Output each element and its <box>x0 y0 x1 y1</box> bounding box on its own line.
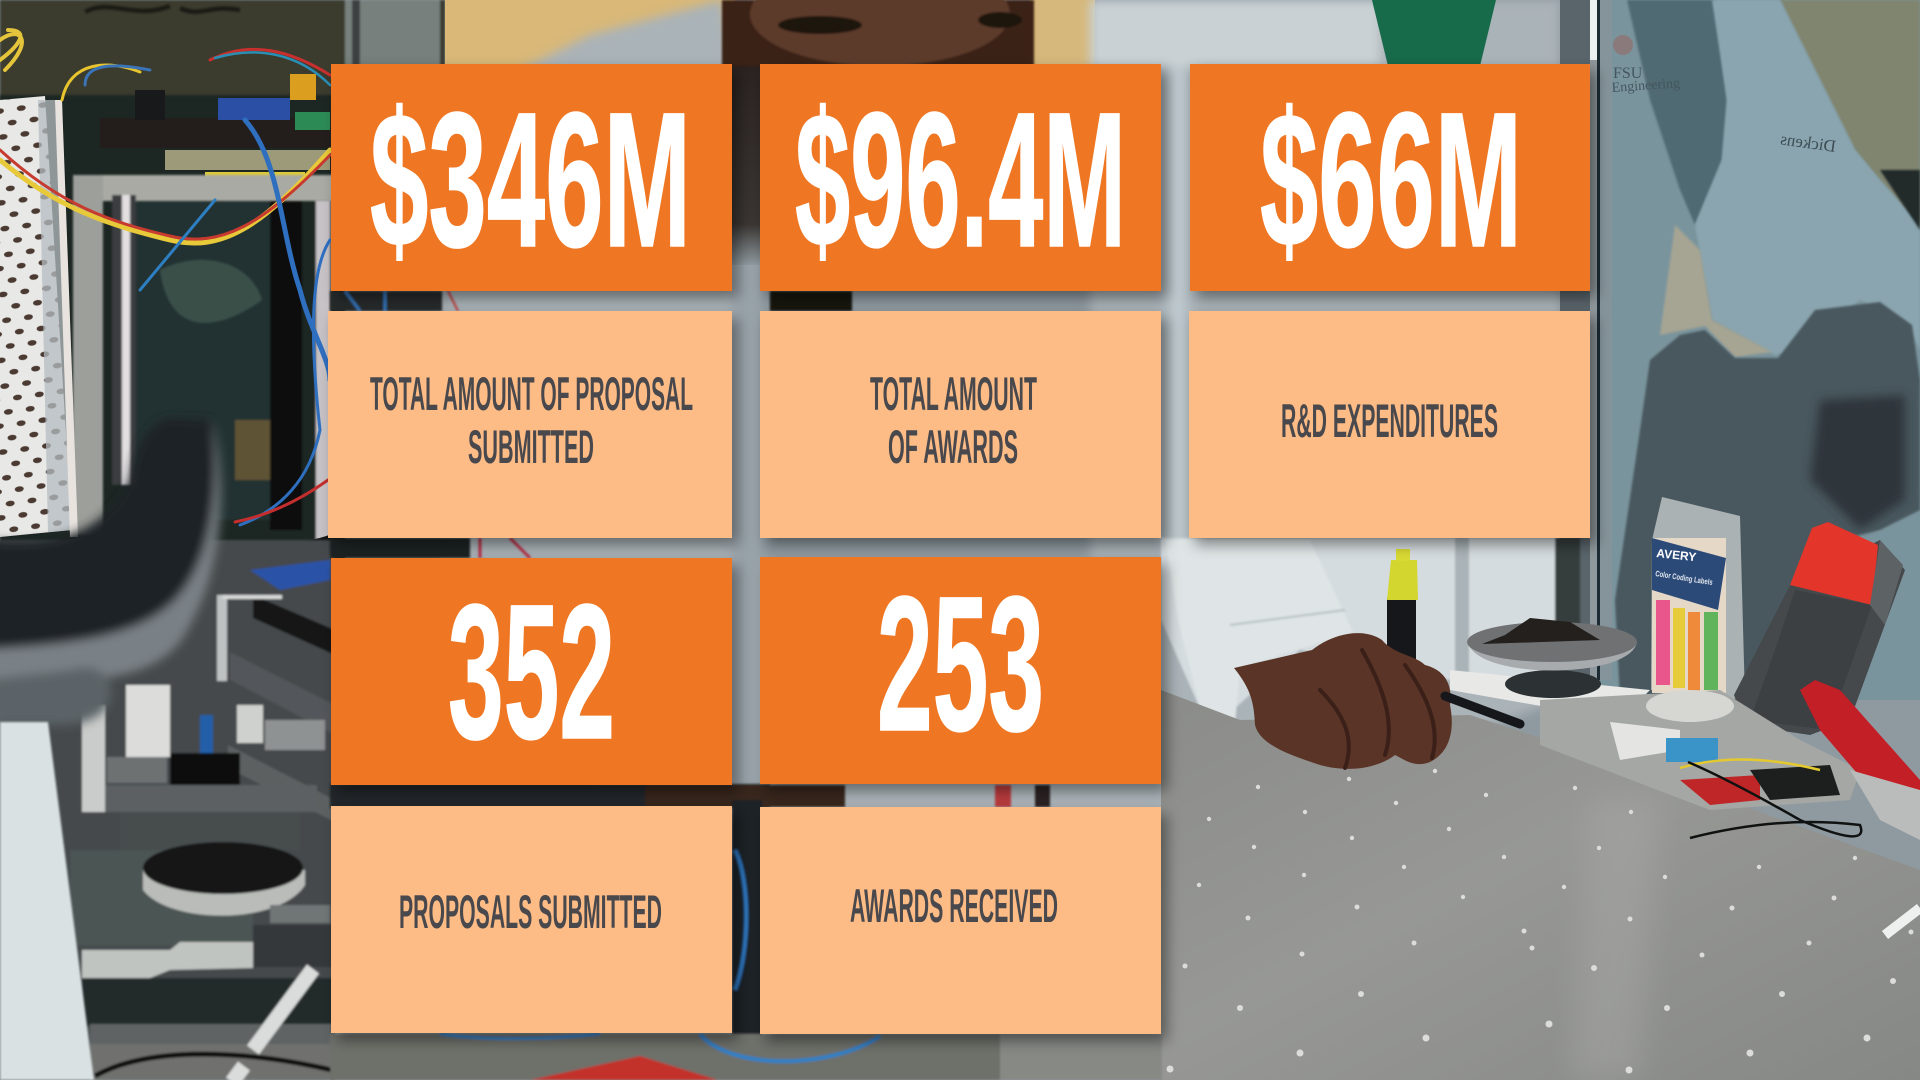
dark trousers reflection <box>1615 302 1920 700</box>
coat name reflection: Dickens <box>1779 129 1837 156</box>
label <box>870 367 1037 473</box>
dark floor <box>82 978 337 1026</box>
linear rails upper right <box>200 560 335 822</box>
window frame <box>1560 0 1590 680</box>
peach label box <box>760 311 1161 538</box>
white lab coat sleeve <box>1161 538 1580 730</box>
orange value box <box>331 64 732 291</box>
green shirt <box>1372 0 1496 66</box>
coat logo: FSU <box>1613 65 1643 82</box>
coat sleeve reflection <box>1695 0 1920 355</box>
label: SUBMITTED <box>468 420 594 473</box>
white foreground post <box>0 722 94 1080</box>
table light reflection <box>1570 800 1660 1080</box>
product text: Color Coding Labels <box>1655 569 1714 587</box>
orange value box <box>1190 64 1590 291</box>
magnetic bowl <box>1450 618 1650 720</box>
label sheet package <box>1651 497 1745 700</box>
stat card: awards received: AWARDS RECEIVED <box>850 879 1058 932</box>
peach label box <box>328 311 732 538</box>
machine interior dark <box>0 95 345 585</box>
white step plate <box>82 942 253 978</box>
stat card: proposals submitted <box>331 558 732 1033</box>
circuit board and connectors <box>100 74 330 177</box>
value: $66M <box>1260 72 1522 287</box>
coat logo: Engineering <box>1611 76 1681 96</box>
beige reflection <box>1660 225 1772 357</box>
text: TOTAL AMOUNT OF PROPOSAL <box>370 367 693 420</box>
coat logo <box>1611 35 1681 96</box>
value: 352 <box>448 564 615 779</box>
stat card: total awards amount <box>760 64 1161 538</box>
hand holding marker <box>1234 549 1520 769</box>
machine wires <box>0 30 330 552</box>
lab wall top left <box>0 0 445 110</box>
peach label box <box>331 806 732 1033</box>
stat card: proposals submitted: PROPOSALS SUBMITTED <box>399 885 662 938</box>
brand text: AVERY <box>1656 546 1697 564</box>
orange value box <box>331 558 732 785</box>
back wall reflection <box>1780 0 1920 225</box>
row gap shadows and wires <box>330 291 1162 1080</box>
stat card: total proposal amount <box>328 64 732 538</box>
lower machinery <box>0 540 340 1080</box>
value: 253 <box>877 556 1044 771</box>
stat card: R&D expenditures <box>1189 64 1590 538</box>
label: OF AWARDS <box>888 420 1018 473</box>
red scissors handle <box>1800 680 1920 935</box>
peach label box <box>1189 311 1590 538</box>
clear box with electronics <box>1540 690 1861 838</box>
lab coat centre <box>440 0 1560 1000</box>
perforated metal plate <box>0 96 72 537</box>
orange value box <box>760 64 1161 291</box>
aluminium frame <box>73 175 333 535</box>
label <box>370 367 693 473</box>
beard in column gap <box>732 60 760 265</box>
blurred black arm <box>0 418 221 725</box>
turntable stack <box>70 850 253 946</box>
value: $346M <box>370 72 691 287</box>
peach label box <box>760 807 1161 1034</box>
white bracket <box>126 685 170 757</box>
face <box>722 0 1034 311</box>
steel table <box>1161 690 1920 1080</box>
table screw holes <box>1166 769 1914 1074</box>
glass panel with reflected lab coat <box>1560 0 1920 700</box>
orange value box <box>760 557 1161 784</box>
stat card: R&D expenditures: R&D EXPENDITURES <box>1281 394 1498 447</box>
stat card: awards received <box>760 556 1161 1034</box>
tan back wall <box>445 0 735 70</box>
red and grey device <box>1734 522 1905 735</box>
dark shirt reflection <box>1627 0 1727 225</box>
stat card: total awards amount: TOTAL AMOUNT <box>870 367 1037 420</box>
value: $96.4M <box>795 72 1126 287</box>
